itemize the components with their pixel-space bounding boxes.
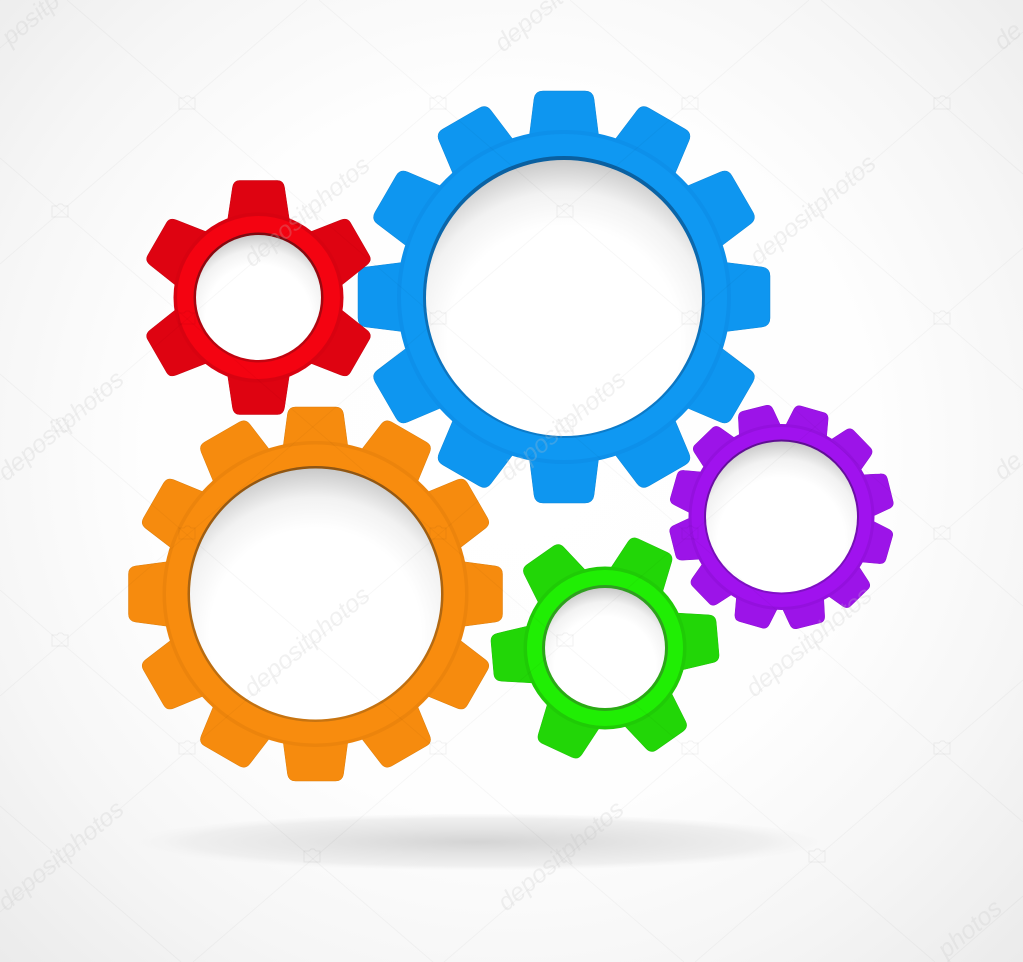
watermark text: depositphotos: [740, 581, 877, 703]
watermark text: depositphotos: [238, 581, 375, 703]
gear: orange: [128, 407, 502, 781]
watermark text: depositphotos: [494, 365, 631, 487]
floor shadow: [136, 814, 818, 870]
watermark camera icons: [52, 96, 950, 862]
watermark text: photos: [931, 894, 1008, 962]
watermark text: depositphotos: [492, 795, 629, 917]
gear: red: [141, 180, 376, 414]
gear: blue: [358, 91, 770, 503]
gear: green: [490, 533, 720, 763]
gear: purple: [667, 403, 896, 631]
watermark text: depositphotos: [744, 149, 881, 271]
watermark text: depositphotos: [238, 151, 375, 273]
